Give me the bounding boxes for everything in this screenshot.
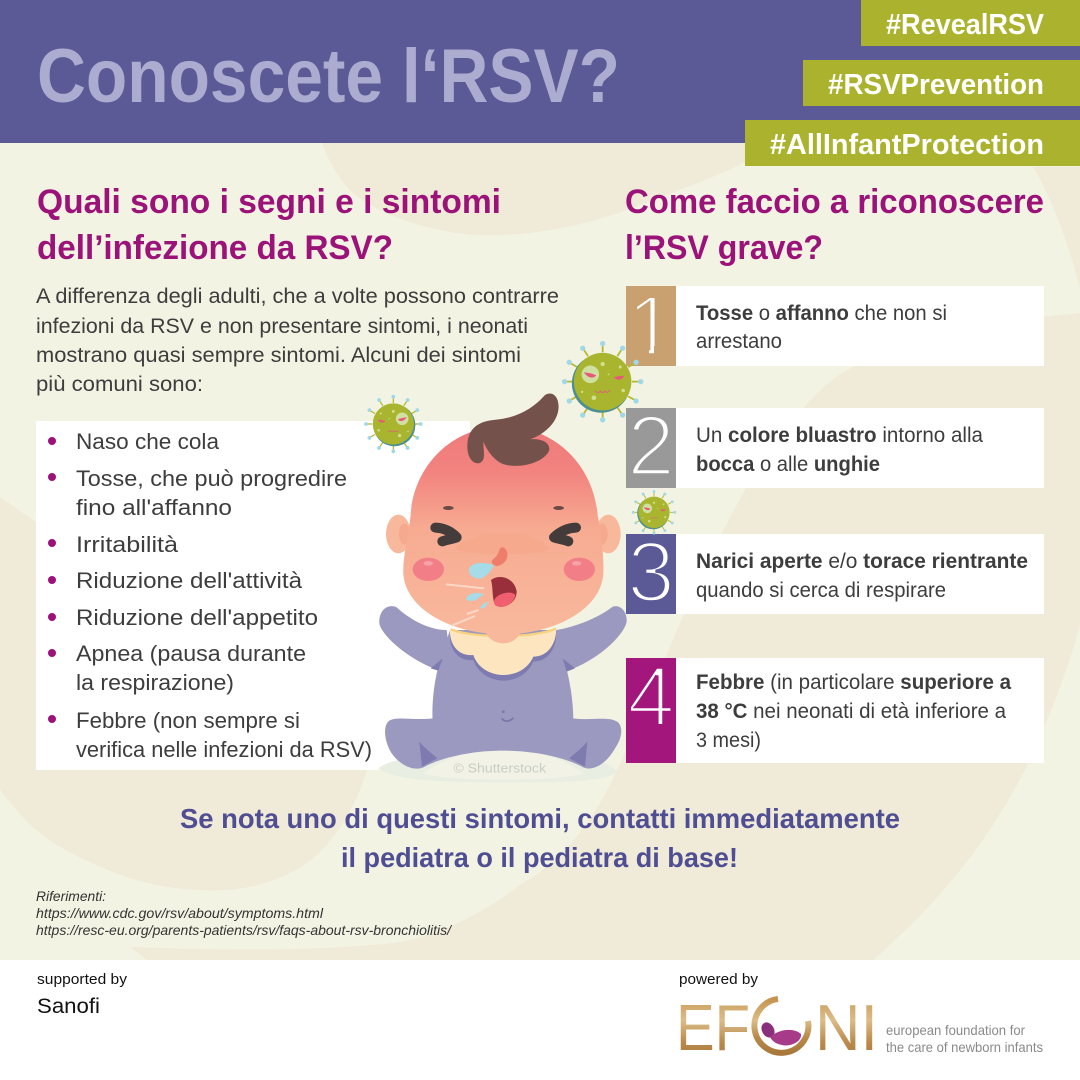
panel: symptom list: Riduzione dell'attività [76,568,303,593]
card 2 [626,399,1044,494]
background with swirl shapes [0,143,1080,960]
card 4 [626,650,1044,763]
card 1: Tosse o affanno che non si [696,302,947,325]
panel: symptom list [36,421,470,770]
powered by EFCNI logo: powered by [679,971,758,988]
references [36,888,453,938]
baby body [379,606,627,769]
card 1: 1 [627,279,675,374]
baby head [386,394,621,635]
heading: severe RSV: Come faccio a riconoscere [625,183,1044,221]
panel: symptom list: verifica nelle infezioni da RSV) [76,737,372,762]
icon: large virus [562,341,643,422]
powered by EFCNI logo: the care of newborn infants [886,1039,1043,1055]
heading: severe RSV [625,183,1044,267]
panel: symptom list: Febbre (non sempre si [76,708,300,733]
hashtag tags [745,0,1080,166]
card 2: 2 [627,399,675,494]
ground shadow [378,748,617,783]
call to action: Se nota uno di questi sintomi, contatti immediatamente [180,803,900,834]
heading: signs and symptoms: dell’infezione da RSV? [37,229,393,267]
panel: symptom list: la respirazione) [76,670,234,695]
card 4: 3 mesi) [696,729,761,752]
card 2: Un colore bluastro intorno alla [696,424,983,447]
references: Riferimenti: [36,888,106,904]
supported by: Sanofi [37,995,100,1018]
references: https://resc-eu.org/parents-patients/rsv/faqs-about-rsv-bronchiolitis/ [36,922,453,938]
card 1 [626,279,1044,374]
heading: severe RSV: l’RSV grave? [625,229,823,267]
intro paragraph: A differenza degli adulti, che a volte possono contrarre [36,285,559,308]
intro paragraph: più comuni sono: [36,373,203,396]
title: Conoscete l‘RSV? [37,34,620,119]
powered by EFCNI logo: EF [676,991,750,1064]
card 2: bocca o alle unghie [696,453,880,476]
panel: symptom list: fino all'affanno [76,495,232,520]
bib [450,629,556,681]
call to action: il pediatra o il pediatra di base! [341,842,738,873]
call to action [180,803,900,873]
intro paragraph: mostrano quasi sempre sintomi. Alcuni dei sintomi [36,344,521,367]
intro paragraph [36,285,559,396]
icon: left virus [364,395,423,453]
icon: small virus [632,490,676,535]
card 3: 3 [627,525,675,620]
heading: signs and symptoms: Quali sono i segni e i sintomi [37,183,501,221]
supported by: supported by [37,971,128,988]
header banner [0,0,1080,143]
hashtag tags: #AllInfantProtection [770,129,1044,161]
powered by EFCNI logo [676,971,1043,1064]
hashtag tags: #RevealRSV [886,9,1045,41]
panel: symptom list: Naso che cola [76,429,220,454]
card 4: Febbre (in particolare superiore a [696,671,1011,694]
illustration: sick baby with viruses [364,341,676,783]
powered by EFCNI logo: NI [815,991,878,1064]
card 3 [626,525,1044,620]
supported by [37,971,128,1018]
footer [0,960,1080,1080]
ground shadow: © Shutterstock [453,760,546,775]
intro paragraph: infezioni da RSV e non presentare sintomi, i neonati [36,315,528,338]
card 3: Narici aperte e/o torace rientrante [696,550,1028,573]
references: https://www.cdc.gov/rsv/about/symptoms.html [36,905,324,921]
panel: symptom list: Irritabilità [76,532,179,557]
card 4: 38 °C nei neonati di età inferiore a [696,700,1006,723]
hashtag tags: #RSVPrevention [828,69,1044,101]
panel: symptom list: Tosse, che può progredire [76,466,347,491]
panel: symptom list: Apnea (pausa durante [76,641,306,666]
heading: signs and symptoms [37,183,501,267]
powered by EFCNI logo: european foundation for [886,1022,1025,1038]
card 1: arrestano [696,330,782,353]
card 4: 4 [627,650,675,745]
card 3: quando si cerca di respirare [696,579,946,602]
panel: symptom list: Riduzione dell'appetito [76,605,318,630]
